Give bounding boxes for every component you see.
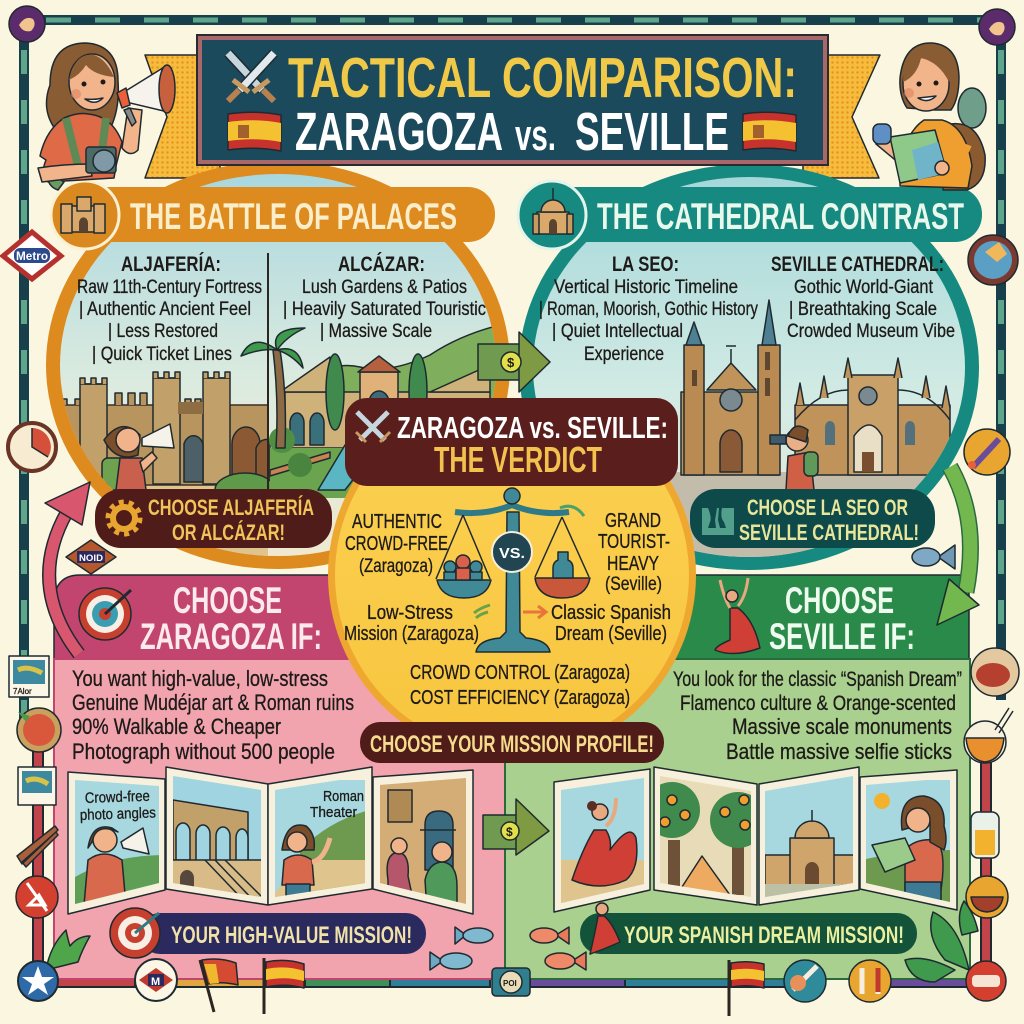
icon: rice bowl [964,708,1013,763]
text: Seville Cathedral: | Breathtaking Scale [789,299,937,320]
icon: target [79,588,131,640]
Seville Cathedral [795,358,950,475]
heading: ZARAGOZA IF: [140,616,322,657]
panel: choose Seville [500,575,970,979]
icon: photo frame upper: 7Alor [13,687,32,696]
icon: target [110,908,160,958]
icon: metro M: M [151,976,160,988]
text: Seville column: (Seville) [605,574,662,595]
scene: Alcazar gardens [241,325,500,498]
icon: castle [61,197,105,233]
fold-out photo strip: Seville [554,767,957,912]
pill: Spanish dream mission [580,903,917,954]
icon: camera: POI [503,979,517,988]
icon: crossed brush [784,960,826,1002]
label: photo angles [80,804,156,824]
pill: Spanish dream mission: YOUR SPANISH DREAM MISSION! [624,922,904,949]
heading pill: cathedral contrast [518,181,982,249]
title banner [197,35,828,165]
icon: small swords [356,412,390,442]
text: Alcazar: Lush Gardens & Patios [302,277,467,298]
character: woman with megaphone [38,43,175,190]
text: Seville column: HEAVY [607,553,659,575]
text: Zaragoza column: AUTHENTIC [352,511,442,533]
text: Zaragoza column [344,511,479,645]
icon: crossed swords [228,53,274,101]
pill: choose Aljaferia or Alcazar: OR ALCÁZAR! [172,520,285,545]
photo: orange trees [660,776,751,897]
text: reasons: Massive scale monuments [732,714,952,739]
icon: small metro sign: NOID [79,553,104,563]
icon: cathedral [533,188,573,234]
panel: teal cathedral circle [519,164,980,572]
text: Aljaferia: | Less Restored [108,321,218,342]
icon: tomato dish [17,708,61,752]
label: Theater [310,804,357,821]
photo: Roman arches [173,776,261,897]
pill: high-value mission: YOUR HIGH-VALUE MISSION! [171,922,412,949]
text: reasons: Battle massive selfie sticks [726,739,952,764]
figure: photographer [770,426,818,490]
icon: photo frame lower [18,767,56,805]
ribbon tail: right [803,55,880,178]
scene: cathedrals [670,299,951,557]
icon: utensils [849,960,891,1002]
text: shared criteria [410,662,630,709]
icon: flag two [264,958,304,1014]
icon: no sign [16,876,58,918]
icon: palm tree [241,328,305,448]
heading pill: battle of palaces [51,181,495,249]
arrow: money arrow upper [478,332,550,392]
heading: SEVILLE IF: [769,616,915,657]
pill: choose your mission profile: CHOOSE YOUR MISSION PROFILE! [370,731,654,758]
text: Seville column: Dream (Seville) [555,623,667,645]
icon: fish pair right panel [530,927,586,970]
icon: metro diamond [3,232,61,279]
photo: Seville palace [765,776,853,897]
divider [267,253,269,490]
text: La Seo: Experience [584,344,664,365]
heading: CHOOSE [785,580,894,621]
icon: dancer [590,903,620,954]
scene: Aljaferia fortress [50,372,275,560]
arrow: red curve to Zaragoza panel [45,482,90,654]
text: reasons: Flamenco culture & Orange-scented [680,692,956,715]
icon: people silhouette [702,508,734,535]
text: Seville Cathedral: Gothic World-Giant [794,277,934,298]
text: Aljaferia: Raw 11th-Century Fortress [77,277,262,298]
text: Zaragoza column: Low-Stress [367,602,453,624]
icon: fish upper right [912,545,955,569]
icon: leaves bottom left [46,930,90,970]
text: reasons [673,668,962,764]
icon: juice jar [971,812,999,858]
icon: clock [8,423,56,471]
icon: flag right [743,112,796,151]
text: Seville column: GRAND [605,510,661,532]
text: Seville Cathedral [771,253,955,342]
text: Seville Cathedral: Crowded Museum Vibe [787,321,955,342]
icon: red dish [966,961,1006,1001]
text: Alcazar: ALCÁZAR: [338,253,425,276]
text: Aljaferia: | Quick Ticket Lines [92,344,232,365]
figure: woman with megaphone [102,424,174,490]
arrows: small swooshes [474,506,584,618]
text: Zaragoza column: CROWD-FREE [345,533,448,555]
text: Alcazar: | Massive Scale [320,321,432,342]
pill: choose La Seo or Seville Cathedral: CHOOSE LA SEO OR [747,495,908,520]
title banner: ZARAGOZA [295,102,503,162]
arrow: money arrow upper: $ [507,355,515,370]
icon: megaphone [117,65,175,126]
photo: Roman theater [275,780,365,897]
text: Aljaferia: ALJAFERÍA: [121,253,221,276]
text: reasons: You want high-value, low-stress [72,666,328,691]
icon: leaves bottom right [905,901,978,982]
pill: choose your mission profile [360,722,664,763]
photo: Mudejar interior [380,778,466,904]
pill: high-value mission [110,908,426,958]
icon: paint brush circle [964,429,1010,475]
La Seo [681,300,780,475]
text: shared criteria: CROWD CONTROL (Zaragoza) [410,662,630,684]
panel: orange palaces circle [46,161,510,569]
text: La Seo: Vertical Historic Timeline [554,277,738,298]
text: La Seo: | Quiet Intellectual [552,321,683,342]
text: Zaragoza column: Mission (Zaragoza) [344,623,479,645]
icon: soup bowl [966,876,1008,918]
text: reasons: Genuine Mudéjar art & Roman ruins [72,690,354,715]
arrow: money arrow lower: $ [506,825,513,839]
text: Aljaferia [77,253,262,365]
icon: metro diamond: Metro [16,249,48,263]
label: Crowd-free [85,788,150,807]
text: La Seo: LA SEO: [612,253,679,276]
pill: choose La Seo or Seville Cathedral: SEVILLE CATHEDRAL! [739,520,919,545]
heading box: verdict [345,398,678,486]
photo: woman with map [866,780,950,902]
text: reasons [72,666,354,764]
text: Seville column [551,510,671,645]
icon: map [890,130,947,183]
title banner: SEVILLE [575,102,729,162]
icon: corner ornament top left [9,6,45,42]
icon: small metro sign [66,540,116,574]
icon: flamenco dancer [715,578,760,654]
icon: star [18,961,58,1001]
text: Alcazar [283,253,486,342]
text: Aljaferia: | Authentic Ancient Feel [79,299,251,320]
photo: flamenco dancer [561,778,644,903]
photo: crowd-free angles [75,780,159,904]
panel: choose Zaragoza [54,575,507,979]
title banner: TACTICAL COMPARISON: [288,46,797,110]
heading pill: battle of palaces: THE BATTLE OF PALACES [130,196,457,237]
heading [769,580,915,657]
text: shared criteria: COST EFFICIENCY (Zaragoza) [410,687,630,709]
heading box: verdict: THE VERDICT [434,439,602,480]
heading box: verdict: ZARAGOZA vs. SEVILLE: [397,410,668,445]
pill: choose La Seo or Seville Cathedral [690,489,935,548]
text: La Seo [539,253,758,365]
heading [140,580,322,657]
arrow: green curve to Seville panel [937,467,979,625]
icon: meat dish [971,648,1019,696]
text: La Seo: | Roman, Moorish, Gothic History [539,299,758,320]
icon: metro M [135,959,177,1001]
ribbon tail: left [145,55,220,178]
label: Roman [323,788,364,805]
icon: shattered map [968,235,1018,285]
pill: choose Aljaferia or Alcazar [95,489,332,548]
text: Seville column: Classic Spanish [551,602,671,624]
title banner: vs. [515,111,556,160]
panel: verdict yellow circle [328,480,696,722]
icon: paint brushes [17,826,58,867]
icon: balance scale [436,488,590,652]
text: Zaragoza column: (Zaragoza) [359,556,433,577]
arrow: money arrow lower [483,799,549,855]
heading: CHOOSE [173,580,282,621]
icon: fish pair left panel [430,927,493,970]
icon: camera [492,968,530,996]
icon: corner ornament top right [979,9,1015,45]
icon: flag left [228,112,281,151]
icon: gear [108,502,140,534]
text: Seville column: TOURIST- [598,531,670,553]
icon: balance scale: VS. [499,545,525,562]
text: Seville Cathedral: SEVILLE CATHEDRAL: [771,253,944,276]
icon: photo frame upper [9,656,49,697]
text: reasons: Photograph without 500 people [72,739,335,764]
icon: flag one [200,959,238,1012]
fold-out photo strip: Zaragoza [68,767,473,915]
pill: choose Aljaferia or Alcazar: CHOOSE ALJAFERÍA [148,495,314,520]
text: Alcazar: | Heavily Saturated Touristic [283,299,486,320]
icon: flag three [729,960,764,1016]
character: woman with map [873,43,986,190]
text: reasons: 90% Walkable & Cheaper [72,714,281,739]
